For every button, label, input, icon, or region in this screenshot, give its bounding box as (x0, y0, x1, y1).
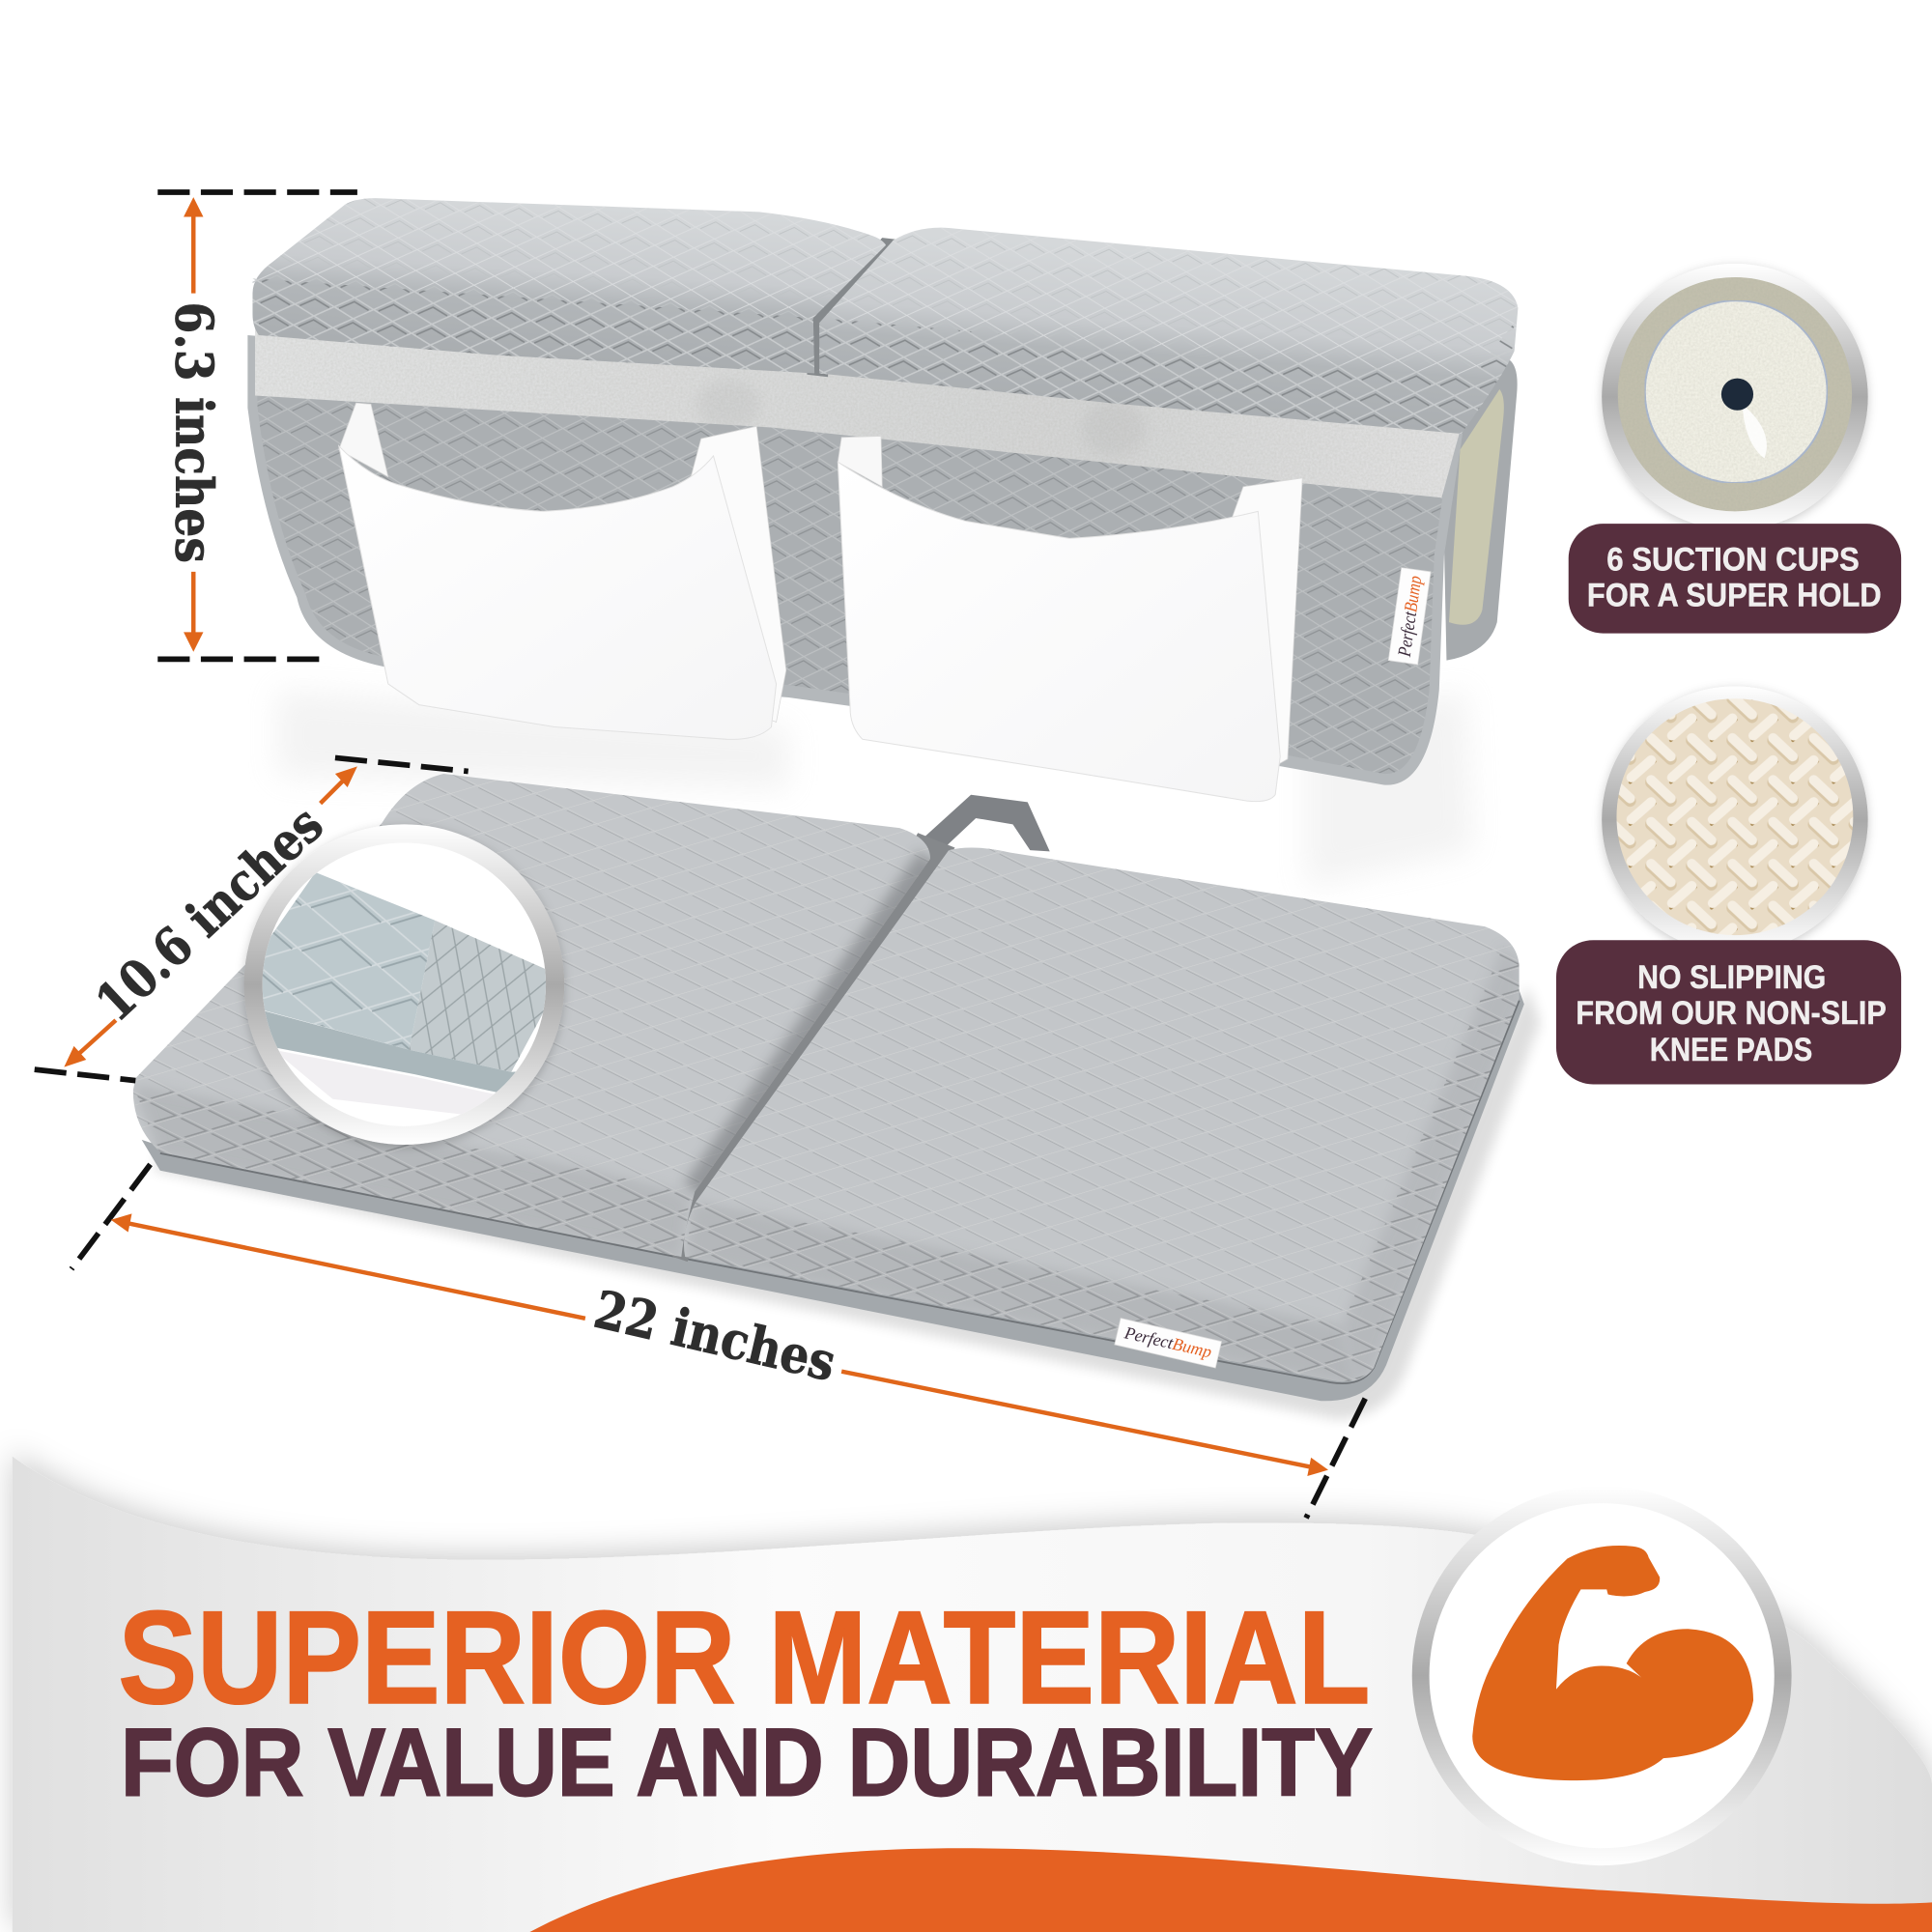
bottom swoosh panel (13, 1457, 1932, 1932)
strap (918, 795, 1050, 859)
suction cup circle (1602, 264, 1868, 529)
zoom circle: cushion edge detail (244, 824, 567, 1146)
left mat half (124, 764, 949, 1269)
highlight (1743, 404, 1767, 458)
beige backing (1618, 277, 1852, 511)
crease shade (695, 859, 930, 1191)
suction cup disc (1645, 300, 1828, 483)
right mat half (678, 838, 1528, 1392)
label text: 6 SUCTION CUPS (1606, 542, 1860, 579)
label text: FOR A SUPER HOLD (1587, 578, 1882, 614)
mat ground shadow (154, 985, 1540, 1419)
right pocket (838, 437, 1302, 802)
brand tag bottom: PerfectBump (1122, 1322, 1213, 1362)
cushion gap (807, 238, 904, 377)
dimension: height 6.3 inches (157, 192, 357, 659)
herringbone texture (1616, 698, 1853, 935)
headline: SUPERIOR MATERIAL (118, 1583, 1370, 1731)
velcro strip (255, 323, 1463, 497)
label text: KNEE PADS (1650, 1032, 1812, 1068)
front band (133, 1084, 690, 1260)
top product: bench pad with pockets (247, 198, 1518, 887)
inner detail (263, 842, 547, 1126)
label text: FROM OUR NON-SLIP (1576, 995, 1887, 1032)
bottom product: folded-out kneeler mat (124, 764, 1540, 1419)
icon: flexed bicep in circle (1412, 1486, 1792, 1865)
ring (1412, 1486, 1792, 1865)
muscle arm (1472, 1546, 1753, 1780)
left cushion (252, 198, 886, 373)
headline (118, 1583, 1373, 1816)
front band (685, 1202, 1355, 1386)
right cushion (819, 228, 1518, 434)
centre pin (1721, 379, 1753, 411)
dimension: width 22 inches (71, 1164, 1365, 1518)
piping seam (160, 1001, 1520, 1383)
non-slip texture circle (1602, 686, 1868, 952)
crease between halves (672, 833, 955, 1262)
depth label: 10.6 inches (84, 794, 334, 1033)
side flap (1441, 359, 1518, 661)
inner white disc (1430, 1503, 1775, 1848)
sub-headline: FOR VALUE AND DURABILITY (121, 1709, 1373, 1816)
dimension: depth 10.6 inches (35, 757, 469, 1081)
height label: 6.3 inches (163, 301, 224, 563)
label: suction cups (1569, 524, 1901, 634)
back panel (247, 335, 1463, 785)
reflection under bench (277, 690, 1472, 887)
brand tag top: PerfectBump (1395, 575, 1426, 659)
label: non-slip (1556, 940, 1901, 1084)
side band (1342, 947, 1523, 1382)
ring (1602, 264, 1868, 529)
ring (1602, 686, 1868, 952)
left pocket (339, 403, 786, 739)
width label: 22 inches (588, 1279, 841, 1393)
mat edge piping (142, 974, 1524, 1401)
ring (244, 824, 564, 1145)
orange wave (529, 1848, 1932, 1932)
label text: NO SLIPPING (1637, 959, 1826, 996)
brand tag bottom (1115, 1319, 1222, 1368)
